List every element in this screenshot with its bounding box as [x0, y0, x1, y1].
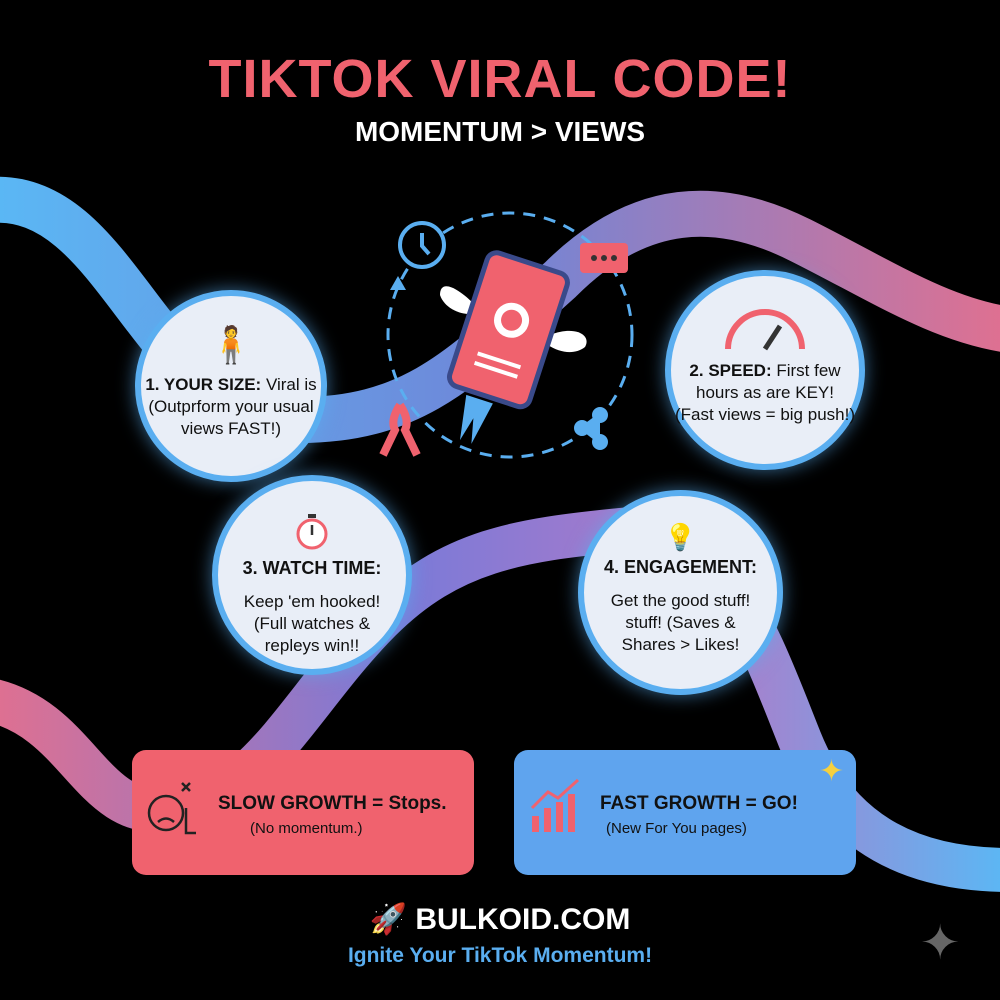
phone	[431, 250, 570, 457]
center illustration: phone with cycle icons	[379, 212, 634, 458]
box: slow growth	[132, 750, 474, 875]
wings	[440, 286, 587, 352]
box: fast growth	[514, 750, 856, 875]
icon: gauge	[725, 309, 805, 350]
circle 2: speed	[665, 270, 865, 470]
circle 2: speed: (Fast views = big push!)	[675, 405, 855, 424]
circle 4: engagement: stuff! (Saves &	[625, 613, 736, 632]
brand: 🚀 BULKOID.COM	[370, 903, 630, 936]
title: TIKTOK VIRAL CODE!	[208, 49, 792, 109]
icon: sparkle: ✦	[819, 755, 844, 788]
icon: sad face	[148, 782, 196, 834]
icon: chat	[580, 243, 628, 273]
circle 3: watch time: 3. WATCH TIME:	[243, 558, 381, 578]
circle 1: your size: 1. YOUR SIZE: Viral is	[145, 375, 317, 394]
box: fast growth: FAST GROWTH = GO!	[600, 793, 798, 814]
circle 3: watch time: repleys win!!	[265, 636, 359, 655]
icon: lightbulb: 💡	[664, 522, 697, 552]
subtitle: MOMENTUM > VIEWS	[355, 116, 645, 147]
icon: ribbon	[383, 405, 417, 455]
circle 4: engagement: 4. ENGAGEMENT:	[604, 557, 757, 577]
icon: share	[576, 409, 606, 448]
icon: person: 🧍	[209, 324, 253, 365]
box: slow growth: (No momentum.)	[250, 820, 363, 837]
icon: growth chart	[531, 779, 579, 832]
icon: stopwatch	[400, 223, 444, 267]
circle 2: speed: 2. SPEED: First few	[689, 361, 841, 380]
circle 1: your size: (Outprform your usual	[148, 397, 314, 416]
box: fast growth: (New For You pages)	[606, 820, 747, 837]
circle 2: speed: hours as are KEY!	[696, 383, 834, 402]
icon: corner sparkle: ✦	[920, 917, 960, 970]
circle 4: engagement: Shares > Likes!	[622, 635, 739, 654]
circle 4: engagement	[578, 490, 783, 695]
circle 3: watch time	[212, 475, 412, 675]
circle 3: watch time: Keep 'em hooked!	[244, 592, 380, 611]
icon: stopwatch	[296, 514, 328, 550]
circle 1: your size: views FAST!)	[181, 419, 281, 438]
circle 4: engagement: Get the good stuff!	[611, 591, 750, 610]
box: slow growth: SLOW GROWTH = Stops.	[218, 793, 447, 814]
circle 3: watch time: (Full watches &	[254, 614, 370, 633]
tagline: Ignite Your TikTok Momentum!	[348, 944, 652, 967]
circle 1: your size	[135, 290, 327, 482]
